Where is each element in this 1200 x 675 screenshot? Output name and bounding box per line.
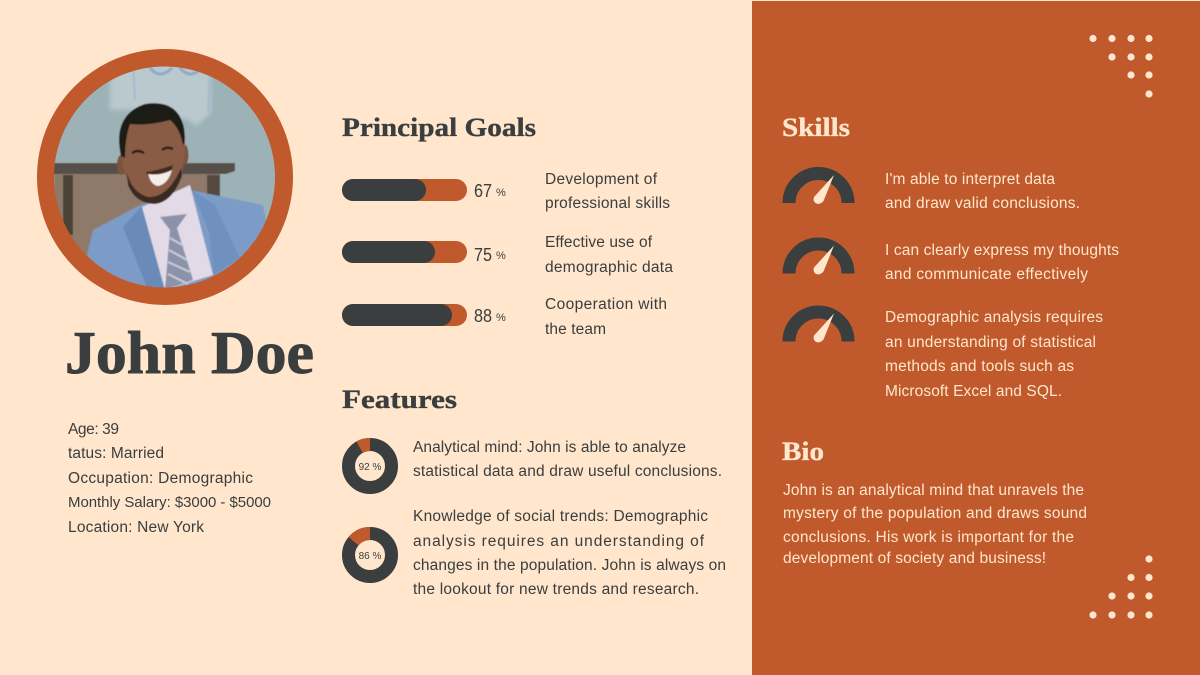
- demographics text block: Location: New York: [68, 519, 204, 536]
- feature 2: donut and text: the lookout for new trends and research.: [413, 581, 699, 598]
- feature 1: donut and text: Analytical mind: John is able to analyze: [413, 439, 686, 456]
- skill 2: gauge and text: and communicate effectively: [885, 266, 1088, 283]
- decorative dots: bottom right: [1089, 555, 1153, 619]
- bio text block: John is an analytical mind that unravels the: [783, 482, 1084, 499]
- bio text block: mystery of the population and draws sound: [783, 505, 1087, 522]
- skill 3: gauge and text: Microsoft Excel and SQL.: [885, 383, 1062, 400]
- goal 3: bar and label: [342, 296, 667, 338]
- skill 1: gauge and text: I'm able to interpret data: [885, 171, 1055, 188]
- skill 1: gauge and text: [789, 171, 1080, 212]
- demographics text block: [68, 421, 271, 536]
- goal 3: bar and label: 88: [474, 306, 492, 326]
- goal 3: bar and label: Cooperation with: [545, 296, 667, 313]
- demographics text block: Monthly Salary: $3000 - $5000: [68, 494, 271, 511]
- goal 1: bar and label: 67: [474, 181, 492, 201]
- panel: right column background: [752, 1, 1200, 675]
- goal 2: bar and label: demographic data: [545, 259, 673, 276]
- feature 2: donut and text: analysis requires an understanding of: [413, 533, 705, 550]
- heading: bio: Bio: [782, 437, 824, 466]
- bio text block: conclusions. His work is important for the: [783, 529, 1074, 546]
- heading: features: Features: [342, 385, 457, 414]
- name title: John Doe: [65, 320, 314, 386]
- heading: skills: Skills: [782, 113, 850, 142]
- goal 1: bar and label: Development of: [545, 171, 658, 188]
- feature 1: donut and text: statistical data and draw useful conclusions.: [413, 463, 722, 480]
- demographics text block: tatus: Married: [68, 445, 164, 462]
- demographics text block: Occupation: Demographic: [68, 470, 253, 487]
- skill 3: gauge and text: methods and tools such as: [885, 358, 1074, 375]
- portrait photo: [37, 49, 293, 305]
- bio text block: [783, 482, 1087, 567]
- skill 3: gauge and text: Demographic analysis requires: [885, 309, 1103, 326]
- bio text block: development of society and business!: [783, 550, 1046, 567]
- skill 2: gauge and text: I can clearly express my thoughts: [885, 242, 1119, 259]
- feature 2: donut and text: Knowledge of social trends: Demographic: [413, 508, 708, 525]
- demographics text block: Age: 39: [68, 421, 119, 438]
- goal 3: bar and label: %: [496, 312, 506, 324]
- skill 3: gauge and text: an understanding of statistical: [885, 334, 1096, 351]
- feature 2: donut and text: 86 %: [359, 551, 382, 562]
- goal 2: bar and label: Effective use of: [545, 234, 653, 251]
- goal 2: bar and label: %: [496, 250, 506, 262]
- feature 2: donut and text: [348, 508, 726, 598]
- feature 1: donut and text: 92 %: [359, 462, 382, 473]
- skill 2: gauge and text: [789, 242, 1119, 283]
- decorative dots: top right: [1089, 35, 1153, 98]
- goal 2: bar and label: [342, 234, 673, 276]
- goal 1: bar and label: [342, 171, 670, 212]
- skill 3: gauge and text: [789, 309, 1103, 400]
- goal 1: bar and label: professional skills: [545, 195, 670, 212]
- feature 2: donut and text: changes in the population. John is always on: [413, 557, 726, 574]
- heading: principal goals: Principal Goals: [342, 113, 536, 142]
- goal 2: bar and label: 75: [474, 245, 492, 265]
- feature 1: donut and text: [348, 439, 722, 488]
- goal 3: bar and label: the team: [545, 321, 606, 338]
- goal 1: bar and label: %: [496, 187, 506, 199]
- skill 1: gauge and text: and draw valid conclusions.: [885, 195, 1080, 212]
